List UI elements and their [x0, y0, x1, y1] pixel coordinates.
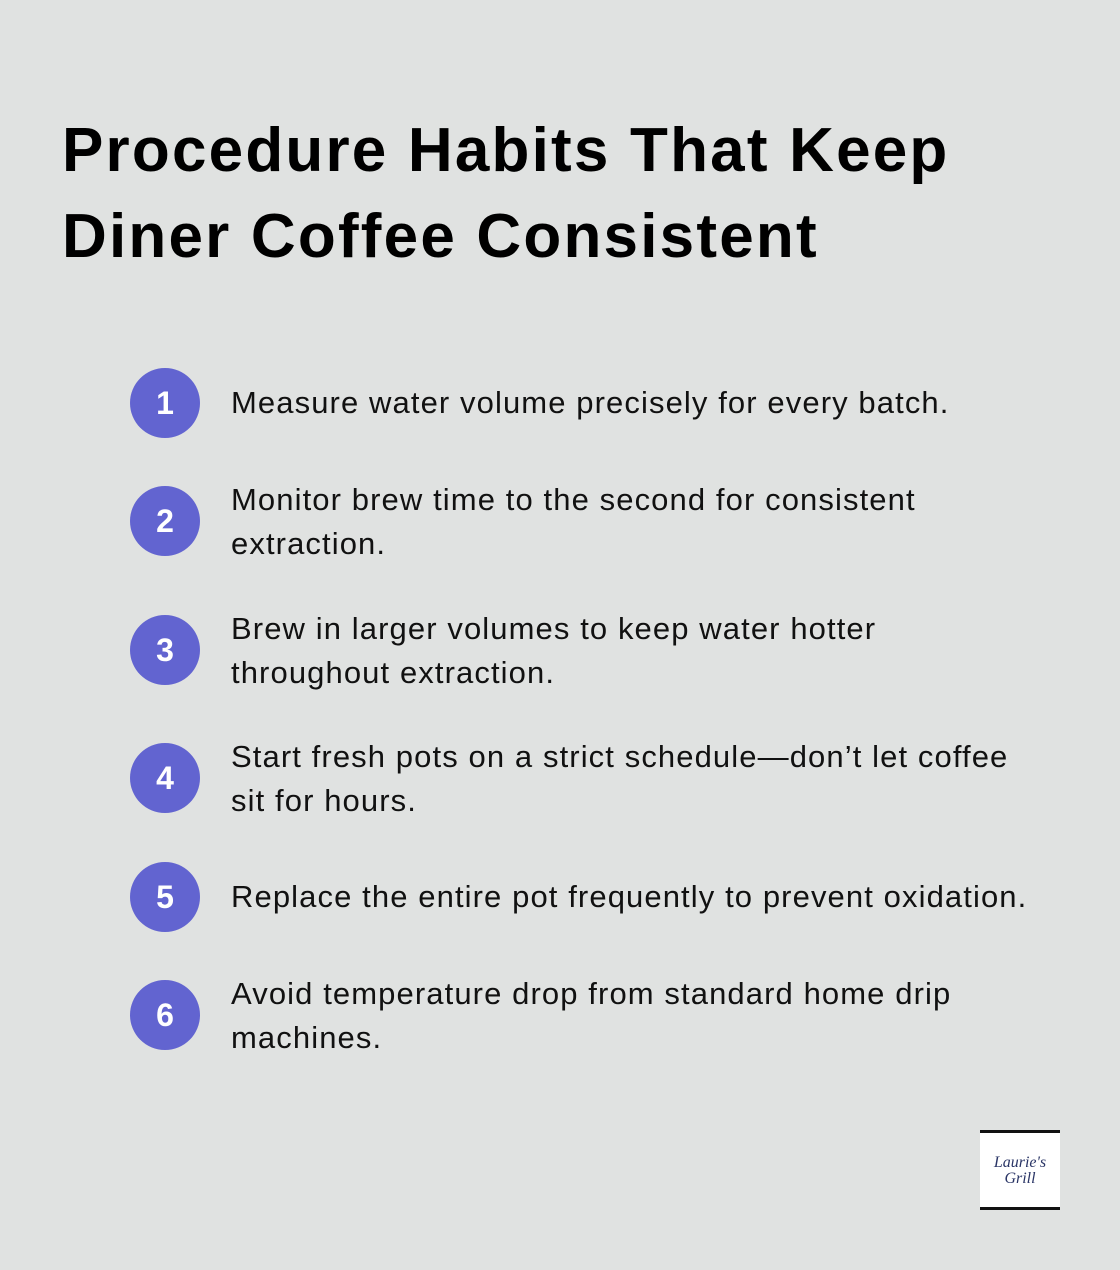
- item 2: extraction.: [231, 526, 386, 561]
- item 6: 6: [156, 997, 174, 1033]
- item 2: 2: [156, 503, 174, 539]
- title: [62, 116, 950, 271]
- item 5: [130, 862, 1027, 932]
- item 6: [130, 976, 951, 1055]
- item 1: Measure water volume precisely for every batch.: [231, 385, 949, 420]
- item 6: machines.: [231, 1020, 382, 1055]
- item 6: Avoid temperature drop from standard home drip: [231, 976, 951, 1011]
- item 4: [130, 739, 1008, 818]
- item 2: Monitor brew time to the second for consistent: [231, 482, 916, 517]
- title: Procedure Habits That Keep: [62, 116, 950, 185]
- logo: [980, 1130, 1060, 1210]
- item 2: [130, 482, 916, 561]
- title: Diner Coffee Consistent: [62, 202, 819, 271]
- item 5: 5: [156, 879, 174, 915]
- item 5: Replace the entire pot frequently to prevent oxidation.: [231, 879, 1027, 914]
- item 4: Start fresh pots on a strict schedule—don’t let coffee: [231, 739, 1008, 774]
- logo: Grill: [1004, 1170, 1036, 1187]
- item 3: Brew in larger volumes to keep water hotter: [231, 611, 876, 646]
- item 1: 1: [156, 385, 174, 421]
- logo: Laurie's: [994, 1154, 1046, 1171]
- item 3: throughout extraction.: [231, 655, 555, 690]
- item 3: 3: [156, 632, 174, 668]
- item 4: sit for hours.: [231, 783, 417, 818]
- item 1: [130, 368, 949, 438]
- item 3: [130, 611, 876, 690]
- item 4: 4: [156, 760, 174, 796]
